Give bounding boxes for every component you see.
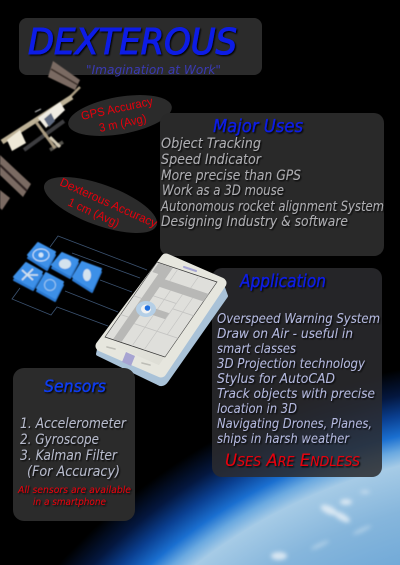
location marker — [136, 301, 156, 317]
phone side — [98, 285, 226, 384]
text block: application list: Track objects with precise — [217, 386, 375, 402]
title: DEXTEROUS — [28, 22, 237, 63]
note: smartphone sensors: in a smartphone — [33, 497, 106, 508]
text block: application list: Stylus for AutoCAD — [217, 371, 335, 387]
key 5 — [37, 273, 63, 301]
text block: sensors list — [20, 416, 127, 480]
panel: sensors — [13, 368, 135, 521]
phone body — [101, 259, 221, 372]
callout: uses are endless: USES ARE ENDLESS — [225, 451, 360, 471]
icon: space station — [0, 61, 80, 210]
text block: application list: 3D Projection technology — [217, 356, 366, 372]
text block: major uses list: Designing Industry & software — [161, 214, 348, 230]
text block: application list: Navigating Drones, Planes, — [217, 416, 372, 432]
icon: smartphone with map — [98, 259, 226, 384]
text block: application list: smart classes — [217, 341, 296, 357]
text block: major uses list: Work as a 3D mouse — [162, 183, 284, 199]
panel: major uses — [160, 113, 384, 256]
text block: sensors list: (For Accuracy) — [27, 464, 120, 480]
text block: application list: ships in harsh weather — [217, 431, 350, 447]
heading: major uses: Major Uses — [213, 116, 303, 137]
key 1 — [28, 243, 55, 270]
earth horizon — [0, 300, 400, 565]
key 4 — [14, 263, 42, 290]
callout: Dexterous accuracy: 1 cm (Avg) — [66, 195, 122, 230]
note: smartphone sensors: All sensors are available — [17, 485, 131, 496]
text block: application list: Overspeed Warning System — [217, 311, 380, 327]
speaker — [184, 267, 196, 271]
home button — [122, 352, 135, 366]
text block: application list: Draw on Air - useful in — [217, 326, 353, 342]
text block: sensors list: 1. Accelerometer — [20, 416, 127, 432]
panel: application — [212, 268, 382, 477]
text block: major uses list — [160, 136, 384, 230]
panel: title — [19, 18, 262, 75]
callout: GPS accuracy — [65, 88, 175, 143]
key 2 — [52, 253, 78, 278]
callout: GPS accuracy: GPS Accuracy — [80, 94, 154, 123]
text block: major uses list: More precise than GPS — [161, 168, 301, 184]
callout: GPS accuracy: 3 m (Avg) — [98, 111, 148, 135]
text block: sensors list: 3. Kalman Filter — [20, 448, 118, 464]
text block: application list — [217, 311, 380, 447]
heading: application: Application — [239, 271, 326, 292]
icon: sensor keys — [14, 243, 101, 301]
note: smartphone sensors — [17, 485, 131, 508]
text block: application list: location in 3D — [217, 401, 297, 417]
text block: major uses list: Speed Indicator — [161, 152, 262, 168]
callout: Dexterous accuracy — [37, 165, 164, 245]
callout: Dexterous accuracy: Dexterous Accuracy — [58, 175, 159, 230]
heading: sensors: Sensors — [44, 377, 106, 397]
text block: major uses list: Object Tracking — [161, 136, 261, 152]
soft keys — [107, 347, 150, 365]
key 3 — [73, 262, 101, 292]
phone screen with map — [105, 262, 217, 357]
connector lines — [12, 236, 147, 326]
tagline: "Imagination at Work" — [86, 62, 221, 77]
text block: sensors list: 2. Gyroscope — [20, 432, 99, 448]
